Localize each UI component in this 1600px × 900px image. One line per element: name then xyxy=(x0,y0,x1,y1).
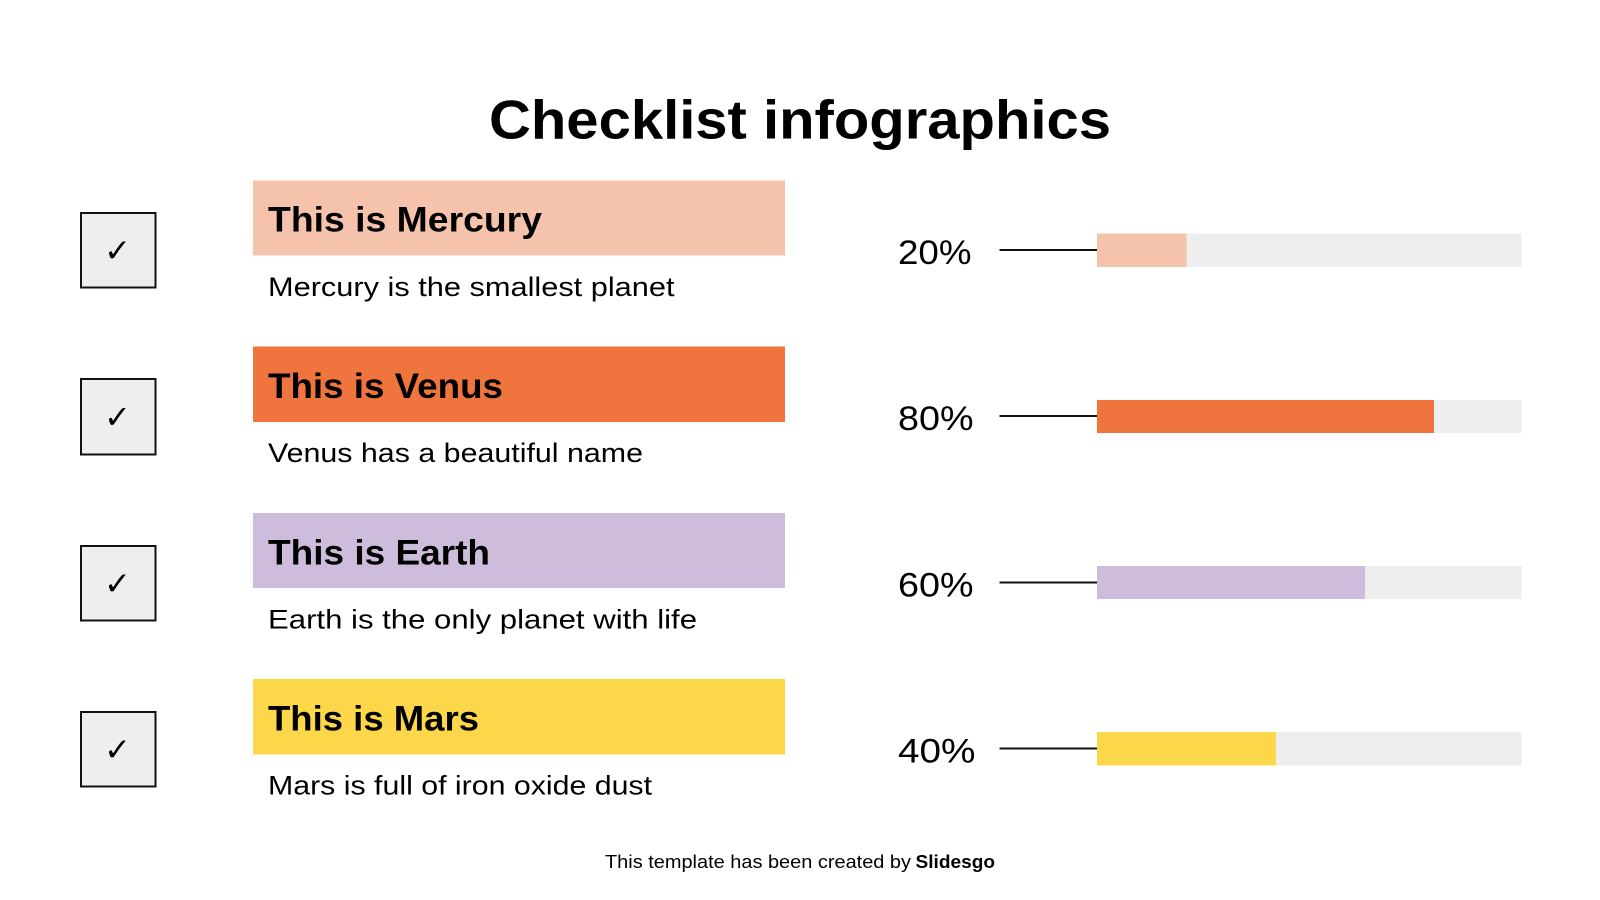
checkbox: Mercury: ✓ xyxy=(104,232,131,270)
title: Checklist infographics xyxy=(489,88,1111,150)
footer credit: Slidesgo xyxy=(916,852,995,872)
checkbox: Venus xyxy=(81,379,156,454)
banner: This is Mercury: This is Mercury xyxy=(268,200,543,240)
connector: Venus xyxy=(1000,415,1097,417)
description: Mercury: Mercury is the smallest planet xyxy=(268,272,675,302)
banner: This is Mars xyxy=(253,679,785,754)
banner: This is Venus: This is Venus xyxy=(268,367,503,406)
description: Venus: Venus has a beautiful name xyxy=(268,438,643,468)
progress bar: 60% xyxy=(1097,566,1522,599)
checkbox: Mars xyxy=(81,712,156,786)
connector: Mercury xyxy=(1000,249,1097,251)
description: Mars: Mars is full of iron oxide dust xyxy=(268,771,653,801)
progress bar: 80% xyxy=(1097,400,1522,433)
checkbox: Mercury xyxy=(81,213,156,288)
percentage: 40%: 40% xyxy=(898,733,976,771)
percentage: 80%: 80% xyxy=(898,400,974,438)
banner: This is Earth: This is Earth xyxy=(268,534,490,572)
checkbox: Mars: ✓ xyxy=(104,730,131,768)
progress bar: 40% xyxy=(1097,732,1522,766)
description: Earth: Earth is the only planet with life xyxy=(268,605,697,635)
checkbox: Earth: ✓ xyxy=(104,564,131,602)
panel: Mars row xyxy=(81,679,1522,801)
percentage: 20%: 20% xyxy=(898,234,972,272)
banner: This is Venus xyxy=(253,346,785,422)
checkbox: Earth xyxy=(81,546,156,620)
checkbox: Venus: ✓ xyxy=(104,398,131,436)
panel: Mercury row xyxy=(81,180,1522,302)
footer credit: This template has been created by xyxy=(605,852,911,872)
banner: This is Earth xyxy=(253,513,785,588)
banner: This is Mars: This is Mars xyxy=(268,700,479,738)
panel: Venus row xyxy=(81,346,1522,468)
banner: This is Mercury xyxy=(253,180,785,256)
progress bar: 20% xyxy=(1097,234,1522,267)
connector: Earth xyxy=(1000,582,1097,584)
panel: Earth row xyxy=(81,513,1522,635)
connector: Mars xyxy=(1000,748,1097,750)
percentage: 60%: 60% xyxy=(898,567,974,605)
